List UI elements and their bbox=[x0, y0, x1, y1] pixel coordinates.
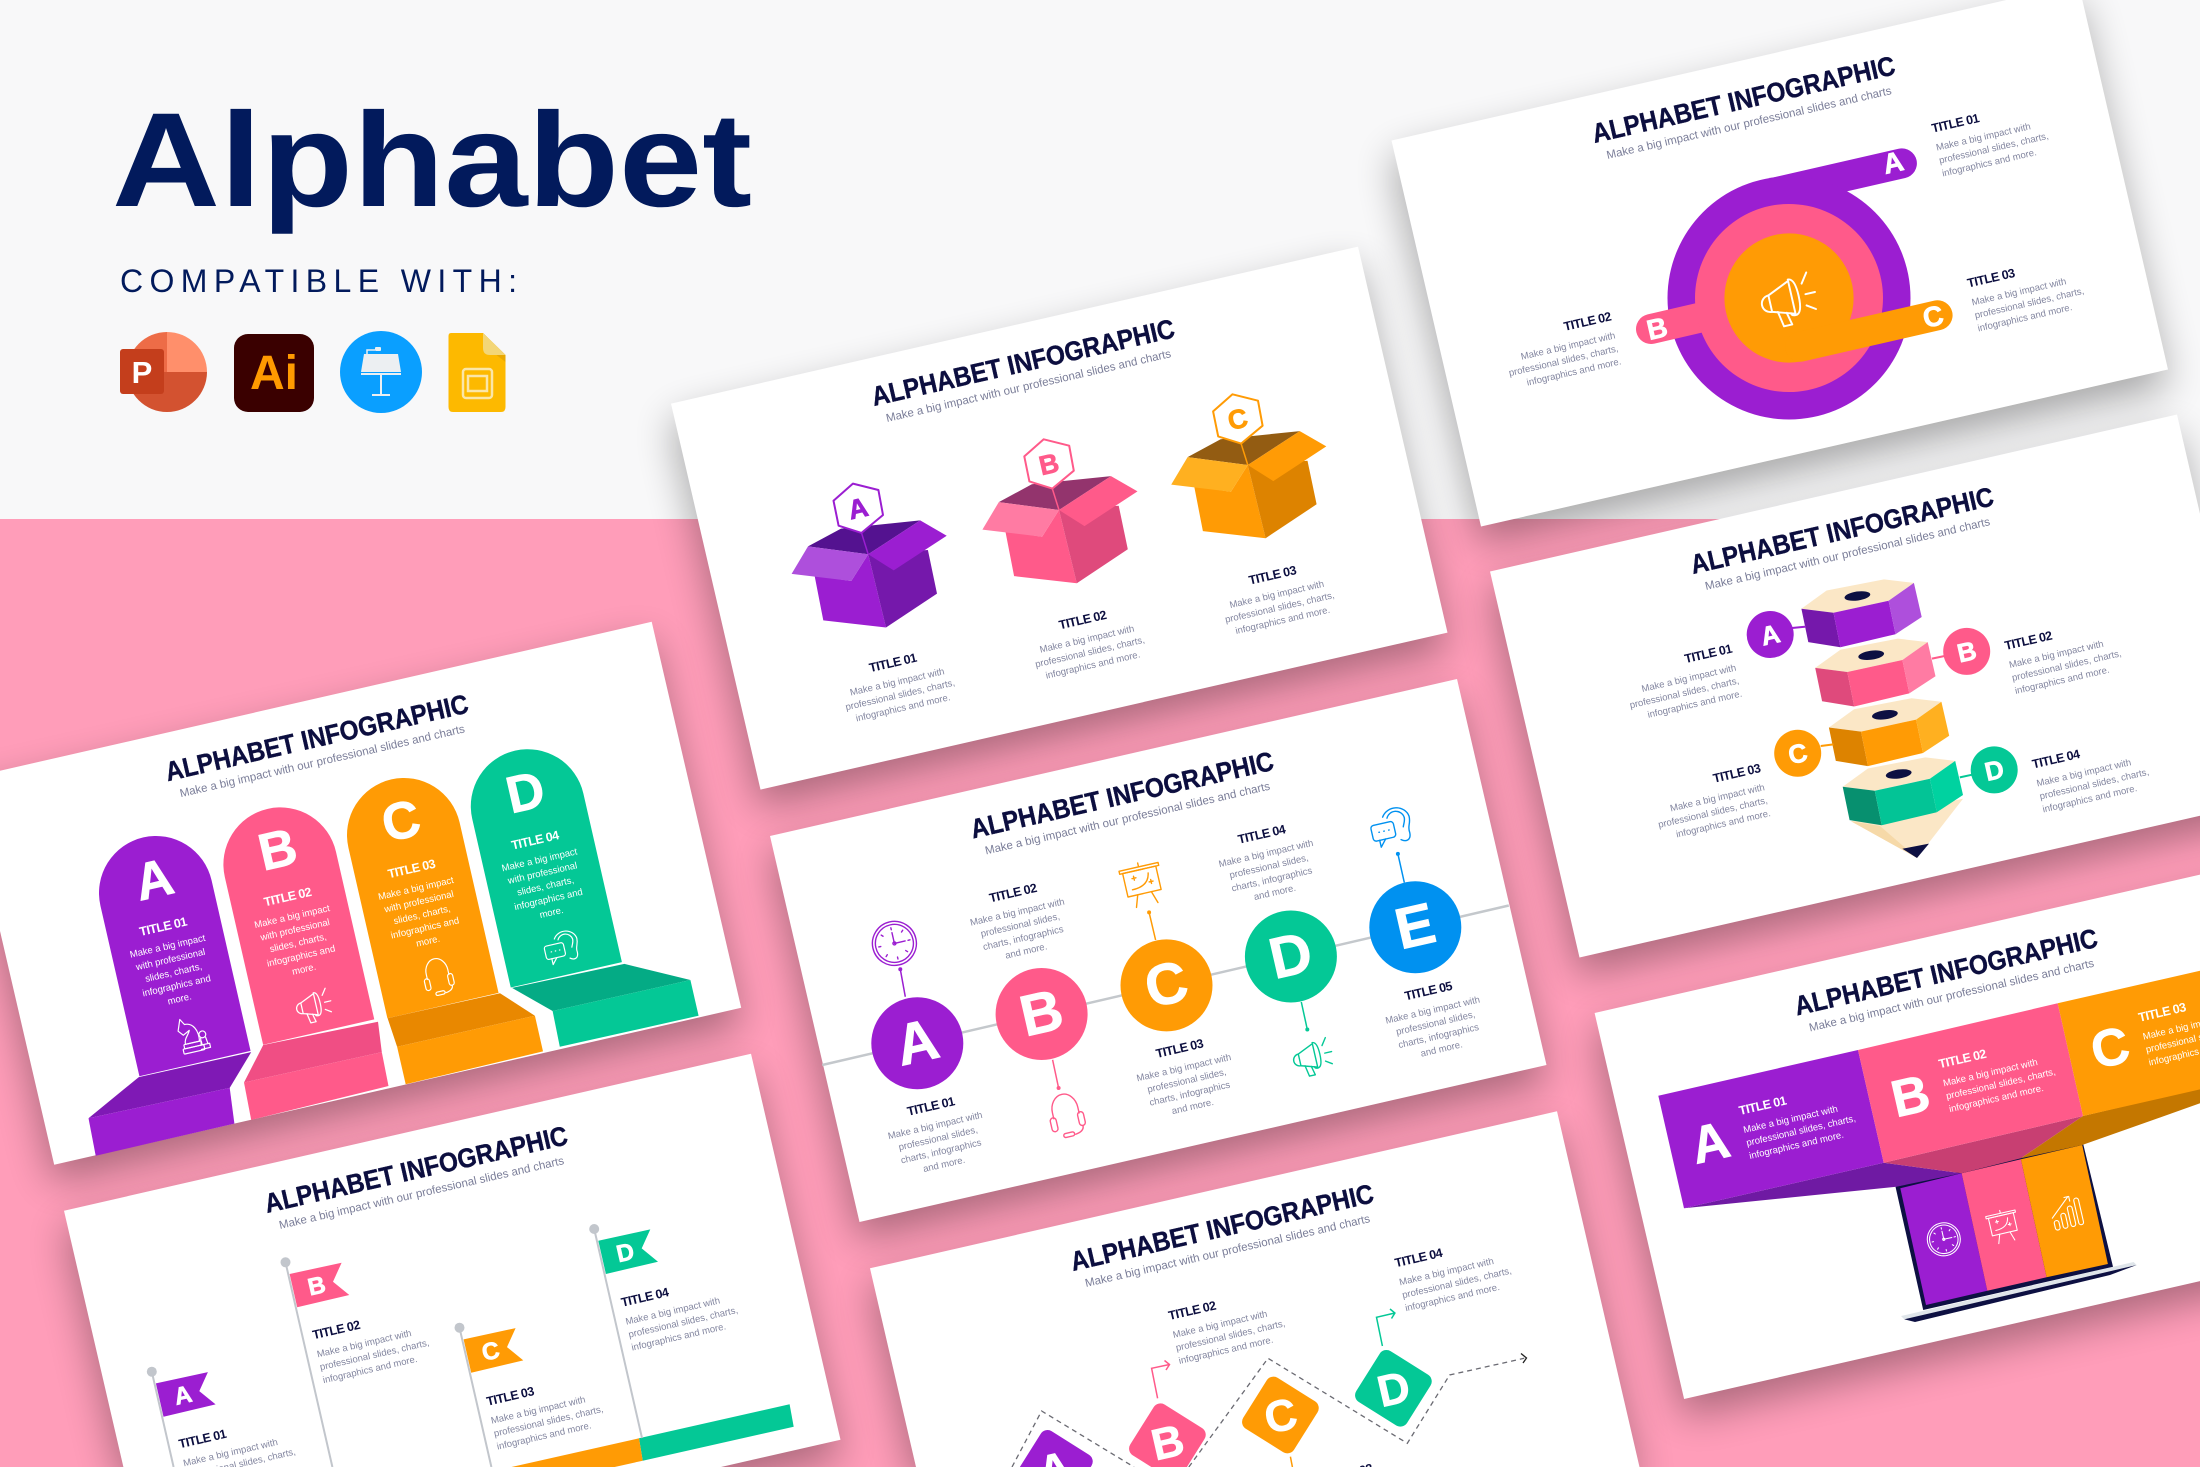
node B text: professional slides, bbox=[980, 911, 1061, 940]
box C: C bbox=[1225, 403, 1251, 436]
pencil tip bbox=[1851, 799, 1963, 858]
arch B bbox=[212, 796, 388, 1120]
arch B: Make a big impact bbox=[253, 903, 331, 931]
box B text: TITLE 02 bbox=[1058, 608, 1108, 632]
banner A bbox=[1658, 1050, 1884, 1208]
bottom bar bbox=[512, 1404, 794, 1467]
box A text: TITLE 01 bbox=[868, 651, 918, 675]
box A bbox=[792, 484, 947, 628]
node C: C bbox=[1139, 948, 1194, 1021]
badge B: B bbox=[1954, 635, 1979, 668]
banner A: Make a big impact with bbox=[1742, 1104, 1839, 1136]
pencil segment A bbox=[1801, 579, 1922, 647]
arch A: more. bbox=[167, 991, 193, 1007]
arch B: more. bbox=[291, 962, 317, 978]
flag C bbox=[454, 1323, 523, 1467]
arch C: infographics and bbox=[390, 915, 460, 942]
label 2: infographics and more. bbox=[1526, 356, 1622, 389]
arch B: infographics and bbox=[266, 943, 336, 970]
arch C: slides, charts, bbox=[393, 903, 452, 927]
icon: Illustrator: Ai bbox=[250, 347, 298, 400]
node C text: professional slides, bbox=[1146, 1067, 1228, 1096]
label 1: TITLE 01 bbox=[1683, 642, 1734, 666]
label 3: Make a big impact with bbox=[1971, 276, 2067, 308]
node E text: and more. bbox=[1420, 1039, 1464, 1060]
node B bbox=[996, 968, 1088, 1140]
panel: timeline slide bbox=[770, 679, 1546, 1222]
label 3: infographics and more. bbox=[1977, 302, 2073, 334]
flag D text: professional slides, charts, bbox=[628, 1305, 739, 1341]
flag B: B bbox=[305, 1271, 328, 1302]
heading: ALPHABET INFOGRAPHIC bbox=[1589, 51, 1898, 149]
box B text: infographics and more. bbox=[1045, 649, 1141, 682]
diamond D text: professional slides, charts, bbox=[1401, 1266, 1513, 1301]
label 2: Make a big impact with bbox=[2008, 639, 2105, 671]
node E: E bbox=[1389, 890, 1441, 962]
label 2: professional slides, charts, bbox=[2011, 648, 2123, 684]
node E text: Make a big impact with bbox=[1384, 994, 1481, 1027]
node D text: Make a big impact with bbox=[1218, 838, 1314, 870]
banner A: professional slides, charts, bbox=[1745, 1113, 1857, 1149]
icon: PowerPoint bbox=[120, 332, 207, 412]
node B: B bbox=[1014, 977, 1069, 1049]
arch D: infographics and bbox=[513, 887, 584, 913]
banner B: TITLE 02 bbox=[1937, 1047, 1988, 1071]
subtitle: compatible with: COMPATIBLE WITH: bbox=[120, 263, 517, 299]
icon: PowerPoint: P bbox=[132, 355, 152, 390]
subheading: Make a big impact with our professional slides and charts bbox=[885, 348, 1173, 425]
flag D text: infographics and more. bbox=[630, 1321, 727, 1354]
node D text: TITLE 04 bbox=[1237, 822, 1287, 847]
flag B text: Make a big impact with bbox=[316, 1328, 413, 1360]
flag C: C bbox=[479, 1337, 502, 1367]
label 1: TITLE 01 bbox=[1930, 111, 1981, 136]
node A text: and more. bbox=[922, 1155, 966, 1175]
box B: B bbox=[1036, 448, 1062, 481]
panel: laptop slide bbox=[1595, 856, 2200, 1399]
flag B text: professional slides, charts, bbox=[319, 1338, 430, 1373]
label 4: TITLE 04 bbox=[2031, 747, 2081, 771]
box C text: professional slides, charts, bbox=[1224, 590, 1336, 626]
background: light top bbox=[0, 0, 2200, 519]
label 1: Make a big impact with bbox=[1935, 121, 2032, 154]
arch A: A bbox=[129, 848, 179, 913]
heading: ALPHABET INFOGRAPHIC bbox=[1792, 923, 2101, 1021]
flag D text: Make a big impact with bbox=[625, 1295, 721, 1328]
diamond D text: infographics and more. bbox=[1404, 1282, 1501, 1314]
arch B: with professional bbox=[258, 917, 331, 944]
label 3: infographics and more. bbox=[1675, 808, 1772, 840]
banner B: Make a big impact with bbox=[1942, 1057, 2039, 1089]
node C bbox=[1118, 859, 1212, 1031]
banner C bbox=[2058, 957, 2200, 1116]
node E text: charts, infographics bbox=[1397, 1022, 1480, 1051]
flag C text: Make a big impact with bbox=[490, 1394, 587, 1427]
banner undersides bbox=[1684, 1088, 2200, 1208]
node A text: professional slides, bbox=[898, 1125, 979, 1153]
banner B: B bbox=[1886, 1064, 1935, 1129]
flag A: A bbox=[172, 1381, 195, 1411]
heading: ALPHABET INFOGRAPHIC bbox=[262, 1121, 571, 1219]
arch B: TITLE 02 bbox=[263, 885, 313, 909]
subheading: Make a big impact with our professional slides and charts bbox=[1084, 1213, 1372, 1290]
diamond D text: TITLE 04 bbox=[1393, 1246, 1444, 1270]
label 1: infographics and more. bbox=[1941, 147, 2038, 179]
node B text: charts, infographics bbox=[982, 924, 1065, 953]
ring chart: B bbox=[1644, 311, 1670, 346]
box C text: infographics and more. bbox=[1234, 605, 1331, 637]
panel: arches slide bbox=[0, 622, 741, 1165]
diamond C bbox=[1239, 1374, 1322, 1467]
banner B: professional slides, charts, bbox=[1945, 1067, 2057, 1102]
diamond D: D bbox=[1373, 1362, 1415, 1417]
label 4: Make a big impact with bbox=[2036, 757, 2132, 789]
pencil segment B bbox=[1815, 639, 1936, 706]
arch C bbox=[336, 767, 543, 1084]
pencil segment D bbox=[1843, 757, 1963, 825]
box A text: infographics and more. bbox=[855, 692, 952, 724]
arch D: more. bbox=[539, 905, 565, 921]
subheading: Make a big impact with our professional slides and charts bbox=[179, 723, 466, 800]
badge A: A bbox=[1758, 618, 1783, 652]
arch C: Make a big impact bbox=[377, 875, 455, 903]
label 3: professional slides, charts, bbox=[1657, 795, 1769, 831]
node C text: TITLE 03 bbox=[1155, 1036, 1205, 1061]
flag C text: professional slides, charts, bbox=[493, 1404, 604, 1440]
diamond B bbox=[1126, 1360, 1209, 1467]
box C bbox=[1171, 394, 1326, 538]
arch A: Make a big impact bbox=[129, 933, 207, 961]
label 2: Make a big impact with bbox=[1520, 330, 1616, 363]
arch D: Make a big impact bbox=[501, 846, 579, 874]
panel: diamonds slide bbox=[870, 1111, 1640, 1467]
label 3: Make a big impact with bbox=[1669, 782, 1766, 814]
diamond A bbox=[1013, 1427, 1096, 1467]
box A text: professional slides, charts, bbox=[844, 678, 956, 713]
badge C: C bbox=[1785, 737, 1810, 770]
node D text: professional slides, bbox=[1228, 853, 1310, 881]
flag C text: infographics and more. bbox=[496, 1420, 593, 1453]
banner A: TITLE 01 bbox=[1738, 1093, 1788, 1118]
arch D: D bbox=[501, 760, 550, 825]
dashed path arrow bbox=[1012, 1354, 1526, 1467]
heading: ALPHABET INFOGRAPHIC bbox=[1688, 482, 1997, 580]
banner A: infographics and more. bbox=[1748, 1130, 1845, 1162]
node A text: Make a big impact with bbox=[887, 1110, 984, 1142]
subheading: Make a big impact with our professional slides and charts bbox=[1704, 516, 1992, 593]
banner C: TITLE 03 bbox=[2137, 1000, 2188, 1025]
arch A: with professional bbox=[134, 947, 206, 973]
label 2: TITLE 02 bbox=[1562, 309, 1613, 334]
node D text: and more. bbox=[1253, 883, 1297, 903]
ring chart: A bbox=[1880, 145, 1906, 180]
arch D: TITLE 04 bbox=[510, 828, 561, 853]
diamond B text: infographics and more. bbox=[1178, 1335, 1274, 1367]
box A text: Make a big impact with bbox=[849, 666, 946, 699]
arch D bbox=[460, 738, 699, 1047]
label 3: TITLE 03 bbox=[1966, 266, 2016, 290]
node B text: and more. bbox=[1004, 941, 1048, 962]
arch A: infographics and bbox=[141, 973, 212, 999]
pencil segment C bbox=[1829, 698, 1949, 766]
panel: boxes slide bbox=[671, 247, 1448, 790]
flag B text: infographics and more. bbox=[322, 1354, 419, 1386]
banner C: C bbox=[2086, 1016, 2135, 1081]
arch C: C bbox=[376, 789, 426, 854]
node B text: TITLE 02 bbox=[988, 881, 1038, 905]
laptop bbox=[1896, 1143, 2137, 1322]
banner B: infographics and more. bbox=[1948, 1083, 2045, 1115]
heading: ALPHABET INFOGRAPHIC bbox=[162, 689, 471, 787]
banner A: A bbox=[1686, 1111, 1735, 1176]
label 2: TITLE 02 bbox=[2003, 628, 2054, 653]
heading: ALPHABET INFOGRAPHIC bbox=[968, 746, 1277, 844]
label 1: professional slides, charts, bbox=[1629, 676, 1740, 711]
flag D: D bbox=[614, 1238, 637, 1268]
node A text: TITLE 01 bbox=[906, 1094, 956, 1119]
box A: A bbox=[845, 492, 871, 525]
diamond D text: Make a big impact with bbox=[1398, 1256, 1495, 1288]
label 2: professional slides, charts, bbox=[1508, 343, 1619, 379]
node C text: Make a big impact with bbox=[1136, 1052, 1232, 1084]
box B bbox=[982, 439, 1138, 583]
icon: Keynote bbox=[340, 331, 422, 413]
diamond C: C bbox=[1260, 1389, 1302, 1444]
flag B bbox=[280, 1257, 349, 1467]
arch D: with professional bbox=[506, 860, 578, 887]
flag D bbox=[589, 1224, 658, 1438]
node E text: professional slides, bbox=[1395, 1009, 1476, 1038]
box B text: Make a big impact with bbox=[1039, 623, 1135, 656]
node D bbox=[1245, 910, 1337, 1079]
arch C: with professional bbox=[382, 889, 455, 916]
subheading: Make a big impact with our professional slides and charts bbox=[278, 1155, 566, 1232]
flag A bbox=[147, 1367, 216, 1467]
panel: flags slide bbox=[64, 1054, 840, 1467]
node A bbox=[868, 917, 963, 1089]
node C text: charts, infographics bbox=[1149, 1080, 1232, 1109]
ring chart: C bbox=[1920, 299, 1946, 334]
node A text: charts, infographics bbox=[900, 1137, 983, 1166]
box C text: TITLE 03 bbox=[1247, 563, 1298, 588]
label 4: infographics and more. bbox=[2042, 783, 2138, 815]
badge D: D bbox=[1982, 754, 2007, 787]
icon: Google Slides bbox=[448, 333, 506, 412]
subheading: Make a big impact with our professional slides and charts bbox=[1605, 85, 1893, 162]
node E text: TITLE 05 bbox=[1403, 979, 1454, 1003]
panel: pencil slide bbox=[1490, 414, 2200, 958]
diamond D bbox=[1352, 1309, 1435, 1430]
label 1: Make a big impact with bbox=[1641, 663, 1737, 695]
ring chart bbox=[1644, 145, 1946, 420]
icon: Illustrator bbox=[234, 334, 314, 412]
box C text: Make a big impact with bbox=[1229, 579, 1325, 611]
node E bbox=[1368, 805, 1461, 973]
arch D: slides, charts, bbox=[516, 875, 575, 899]
badge C bbox=[1774, 730, 1834, 777]
diamond B text: TITLE 02 bbox=[1167, 1298, 1218, 1323]
arch A bbox=[88, 825, 251, 1156]
node D text: charts, infographics bbox=[1231, 865, 1314, 894]
background: pink lower band bbox=[0, 519, 2200, 1467]
arch C: TITLE 03 bbox=[387, 857, 437, 881]
flag A text: TITLE 01 bbox=[177, 1427, 228, 1451]
heading: ALPHABET INFOGRAPHIC bbox=[1068, 1179, 1377, 1277]
main title: Alphabet bbox=[112, 86, 752, 235]
arch A: TITLE 01 bbox=[138, 914, 189, 939]
arch B: B bbox=[253, 818, 303, 883]
label 1: professional slides, charts, bbox=[1938, 131, 2050, 167]
badge A bbox=[1747, 611, 1806, 658]
subheading: Make a big impact with our professional slides and charts bbox=[1808, 958, 2096, 1034]
badge D bbox=[1960, 746, 2018, 793]
arch C: more. bbox=[415, 934, 441, 950]
diamond B text: Make a big impact with bbox=[1172, 1309, 1268, 1341]
label 2: infographics and more. bbox=[2014, 665, 2111, 697]
arch B: slides, charts, bbox=[269, 932, 328, 955]
node D: D bbox=[1263, 919, 1318, 992]
banner B bbox=[1858, 1003, 2083, 1163]
panel: megaphone rings slide bbox=[1392, 0, 2168, 526]
label 4: professional slides, charts, bbox=[2039, 767, 2150, 802]
node C text: and more. bbox=[1171, 1097, 1215, 1117]
node B text: Make a big impact with bbox=[969, 896, 1066, 929]
flag C text: TITLE 03 bbox=[485, 1384, 536, 1409]
flag B text: TITLE 02 bbox=[311, 1318, 362, 1342]
label 1: infographics and more. bbox=[1647, 689, 1743, 721]
label 3: TITLE 03 bbox=[1712, 761, 1762, 786]
box B text: professional slides, charts, bbox=[1034, 635, 1146, 670]
flag D text: TITLE 04 bbox=[620, 1285, 670, 1310]
subheading: Make a big impact with our professional slides and charts bbox=[984, 781, 1272, 857]
arch A: slides, charts, bbox=[144, 961, 203, 985]
heading: ALPHABET INFOGRAPHIC bbox=[869, 314, 1178, 412]
node A: A bbox=[889, 1006, 945, 1079]
badge B bbox=[1932, 628, 1990, 675]
label 3: professional slides, charts, bbox=[1974, 286, 2085, 321]
diamond B text: professional slides, charts, bbox=[1175, 1318, 1286, 1354]
